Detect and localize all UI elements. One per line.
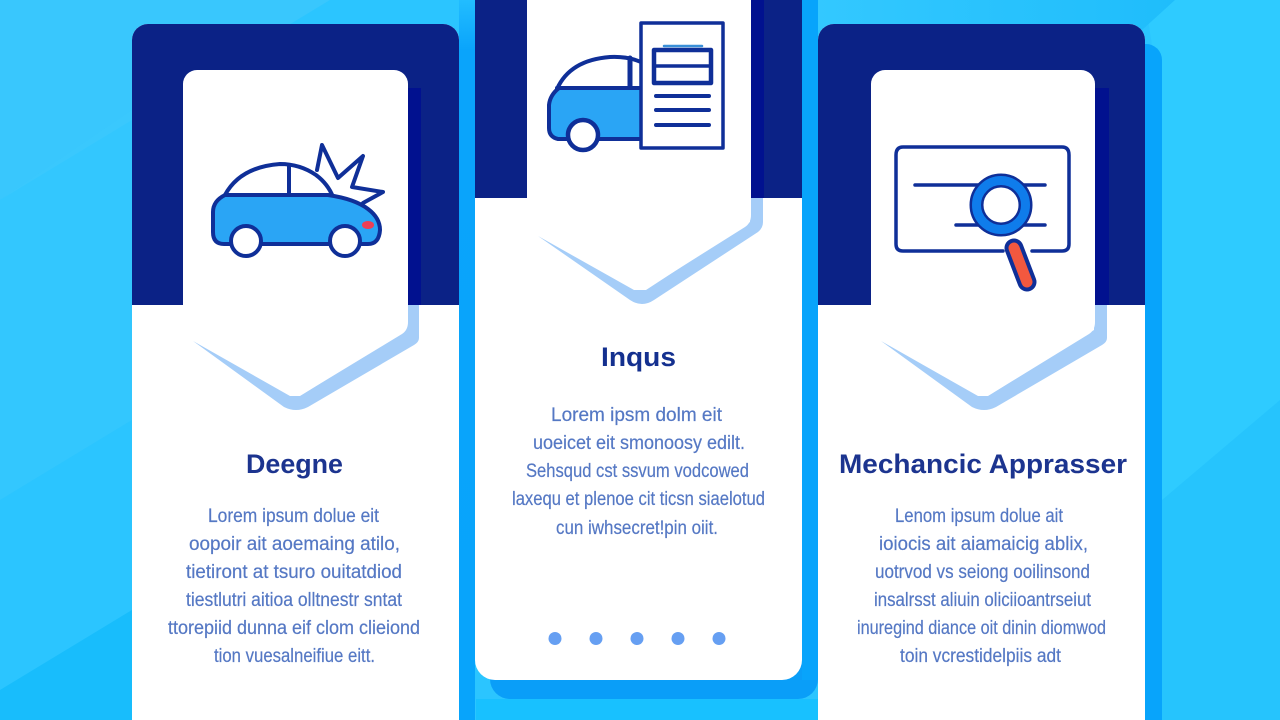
panel: left card [132,0,475,720]
text block: right description: toin vcrestidelpiis adt [900,646,1062,667]
text block: left description: tietiront at tsuro ouitatdiod [186,562,402,583]
text block: middle description: Sehsqud cst ssvum vodcowed [526,461,749,482]
text block: left description: Lorem ipsum dolue eit [208,506,380,527]
text block: middle description: laxequ et plenoe cit ticsn siaelotud [512,489,765,510]
chevron shadow [881,305,1107,410]
inner white panel [871,70,1095,396]
icon: crashed car [213,145,383,256]
text block: right description: Lenom ipsum dolue ait [895,506,1064,527]
icon: magnifier over certificate [896,147,1069,282]
chevron shadow [538,198,763,304]
icon: car and document [549,23,723,150]
text block: middle description: cun iwhsecret!pin oiit. [556,518,718,539]
text block: right description [857,506,1106,667]
heading: Mechancic Appraser: Mechancic Apprasser [839,449,1128,479]
text block: right description: ioiocis ait aiamaicig ablix, [879,534,1088,555]
text block: left description: tion vuesalneifiue eitt. [214,646,375,667]
inner white panel [527,0,751,290]
heading: Deegne: Deegne [246,449,343,479]
heading: Inqus: Inqus [601,342,676,372]
text block: left description: ttorepiid dunna eif clom clieiond [168,618,420,639]
text block: right description: uotrvod vs seiong ooilinsond [875,562,1090,583]
panel: right card [818,24,1162,720]
text block: right description: inuregind diance oit dinin diomwod [857,618,1106,639]
pagination dots [548,632,726,645]
text block: middle description: uoeicet eit smonoosy edilt. [533,433,745,454]
panel: middle card [475,0,818,699]
text block: right description: insalrsst aliuin oliciioantrseiut [874,590,1092,611]
text block: left description [168,506,420,667]
text block: left description: tiestlutri aitioa olltnestr sntat [186,590,403,611]
chevron shadow [193,305,419,410]
text block: middle description [512,405,765,539]
text block: left description: oopoir ait aoemaing atilo, [189,534,400,555]
inner white panel [183,70,408,396]
text block: middle description: Lorem ipsm dolm eit [551,405,723,426]
